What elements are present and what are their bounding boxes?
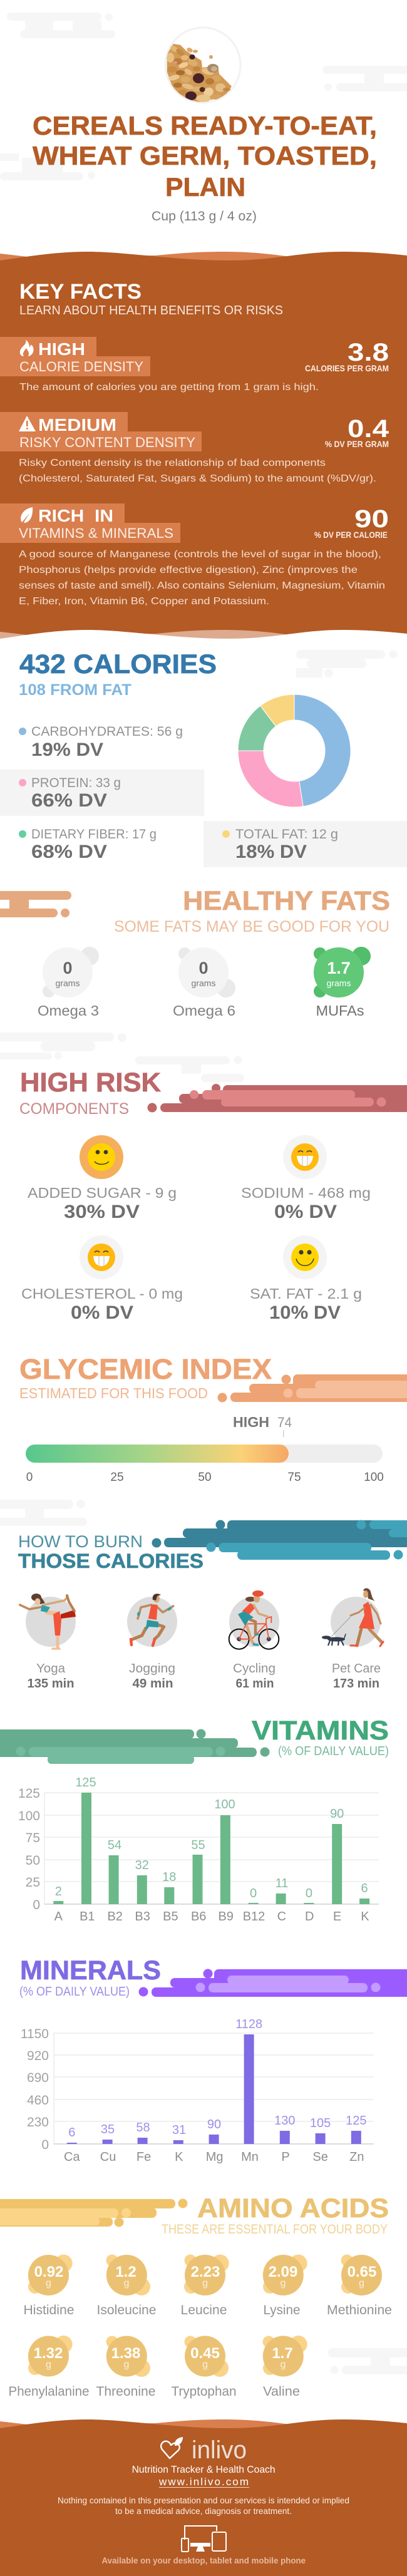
bar chart: minerals: Mg <box>206 2150 223 2164</box>
amino: phenylalanine: 1.32 <box>34 2345 63 2362</box>
panel: high risk components <box>19 1068 407 1323</box>
subheading: key facts: LEARN ABOUT HEALTH BENEFITS OR RISKS <box>19 304 283 317</box>
risk item: added sugar: ADDED SUGAR - 9 g <box>28 1185 177 1201</box>
legend: total fat <box>204 821 407 867</box>
panel: calories <box>0 649 407 867</box>
bar chart: minerals: 920 <box>27 2049 49 2063</box>
bar chart: vitamins: 125 <box>18 1786 40 1801</box>
subheading: minerals: (% OF DAILY VALUE) <box>19 1985 130 1999</box>
bar chart: vitamins: E <box>333 1910 341 1924</box>
panel: how to burn calories <box>18 1520 407 1691</box>
legend: dietary fiber: 68% DV <box>31 842 107 862</box>
bar chart: vitamins: 50 <box>26 1853 40 1868</box>
fact: high calorie density: HIGH <box>38 339 85 359</box>
bar chart: minerals: 230 <box>27 2115 49 2130</box>
gauge scale: 25 <box>110 1471 124 1484</box>
fact: medium risky content density: RISKY CONTENT DENSITY <box>19 435 195 450</box>
icon: flame <box>20 340 34 356</box>
fact: medium risky content density: 0.4 <box>348 415 389 443</box>
fact: rich in vitamins and minerals: senses of taste and smell). Also contains Selenium, Magnesium, Vitamin <box>19 580 385 591</box>
stat: mufas: grams <box>327 978 351 988</box>
stat: omega 6: grams <box>192 978 215 988</box>
amino: leucine <box>180 2254 229 2317</box>
bar chart: vitamins: 75 <box>26 1831 40 1845</box>
bar chart: vitamins: 18 <box>162 1870 176 1884</box>
fact: medium risky content density: (Cholesterol, Saturated Fat, Sugars & Sodium) to the amount (%DV/gr). <box>19 473 376 484</box>
fact: high calorie density: CALORIE DENSITY <box>19 359 143 374</box>
bar chart: minerals: 1128 <box>235 2017 262 2031</box>
amino: histidine: g <box>46 2278 51 2289</box>
decorative banner: healthy fats <box>0 891 71 917</box>
bar chart: minerals: 31 <box>172 2123 186 2137</box>
heading: those calories: THOSE CALORIES <box>18 1550 204 1572</box>
amino: methionine <box>327 2254 392 2317</box>
fact: rich in vitamins and minerals: RICH IN <box>38 506 113 525</box>
bar chart: minerals: Mn <box>241 2150 259 2164</box>
gauge scale: 0 <box>26 1471 33 1484</box>
subheading: healthy fats: SOME FATS MAY BE GOOD FOR YOU <box>114 918 389 935</box>
decorative banner: glycemic <box>218 1374 407 1403</box>
stat: omega 6: Omega 6 <box>173 1002 235 1019</box>
bar chart: minerals: K <box>175 2150 183 2164</box>
amino: lysine <box>263 2255 307 2317</box>
amino: lysine: 2.09 <box>269 2264 297 2280</box>
donut chart: calorie sources <box>238 694 351 807</box>
bar chart: vitamins: B5 <box>163 1910 178 1924</box>
amino: histidine <box>24 2255 74 2317</box>
decorative banner: burn <box>152 1520 407 1560</box>
panel: healthy fats <box>0 886 390 1019</box>
amino: valine: Valine <box>263 2384 300 2399</box>
activity labels: 135 min <box>28 1677 74 1691</box>
bar chart: minerals: 690 <box>27 2071 49 2085</box>
bar chart: vitamins: B2 <box>107 1910 123 1924</box>
amino: leucine: g <box>202 2278 208 2289</box>
amino: methionine: Methionine <box>327 2303 392 2317</box>
fact: rich in vitamins and minerals: Phosphorus (helps provide effective digestion), Zinc (improves the <box>19 565 358 575</box>
heading: amino acids: AMINO ACIDS <box>197 2193 389 2223</box>
bar chart: vitamins: D <box>305 1910 314 1924</box>
bar chart: minerals: 130 <box>274 2114 295 2128</box>
title: WHEAT GERM, TOASTED, <box>33 141 377 170</box>
tagline: Nutrition Tracker & Health Coach <box>132 2465 276 2475</box>
risk item: added sugar <box>28 1135 177 1222</box>
stat: omega 3: Omega 3 <box>38 1002 99 1019</box>
amino: phenylalanine: Phenylalanine <box>9 2384 89 2399</box>
amino: threonine: 1.38 <box>111 2345 140 2362</box>
stat: mufas: MUFAs <box>316 1002 364 1019</box>
fact: medium risky content density: % DV PER GRAM <box>325 439 389 449</box>
bar chart: vitamins: B9 <box>218 1910 234 1924</box>
amino: lysine: Lysine <box>263 2303 301 2317</box>
risk item: sodium: 0% DV <box>274 1202 337 1222</box>
bar chart: vitamins: 54 <box>108 1838 121 1852</box>
amino: phenylalanine <box>9 2336 89 2399</box>
panel: amino acids <box>0 2193 392 2399</box>
amino: phenylalanine: g <box>46 2359 51 2370</box>
availability note: Available on your desktop, tablet and mobile phone <box>101 2555 306 2565</box>
bar chart: vitamins: 100 <box>18 1809 40 1823</box>
legend: total fat: TOTAL FAT: 12 g <box>235 827 338 842</box>
food photo: granola in a circle <box>165 28 240 103</box>
amino: valine: g <box>281 2359 286 2370</box>
stat: omega 3: 0 <box>63 959 73 977</box>
bar chart: minerals: 125 <box>346 2114 366 2128</box>
bar chart: vitamins: B12 <box>243 1910 265 1924</box>
stat: omega 6 <box>173 947 235 1019</box>
disclaimer: to be a medical advice, diagnosis or treatment. <box>115 2506 292 2516</box>
bar chart: vitamins: K <box>361 1910 369 1924</box>
background clouds: header <box>0 13 407 180</box>
subheading: vitamins: (% OF DAILY VALUE) <box>278 1744 389 1758</box>
bar chart: minerals: 105 <box>310 2116 331 2130</box>
amino: threonine <box>96 2336 155 2399</box>
title: CEREALS READY-TO-EAT, <box>33 111 377 140</box>
amino: isoleucine: g <box>124 2278 129 2289</box>
fact: rich in vitamins and minerals: A good source of Manganese (controls the level of sugar in the blood), <box>19 549 381 560</box>
stat: omega 3 <box>38 947 99 1019</box>
stat: omega 3: grams <box>56 978 80 988</box>
decorative banner: amino acids <box>0 2199 188 2227</box>
fact: medium risky content density: Risky Content density is the relationship of bad components <box>19 458 326 468</box>
stat: mufas <box>314 947 371 1019</box>
bar chart: minerals: P <box>281 2150 290 2164</box>
panel: minerals <box>19 1955 407 2164</box>
background clouds: high risk <box>0 1033 244 1082</box>
fact: high calorie density <box>0 337 389 393</box>
risk item: cholesterol: CHOLESTEROL - 0 mg <box>21 1285 183 1302</box>
bar chart: vitamins: 55 <box>191 1838 205 1852</box>
stat: omega 6: 0 <box>198 959 209 977</box>
decorative banner: high risk <box>148 1084 407 1112</box>
heading: minerals: MINERALS <box>20 1955 161 1986</box>
activity labels: Cycling <box>233 1662 276 1676</box>
activity labels: Yoga <box>36 1662 66 1676</box>
subheading: from fat: 108 FROM FAT <box>19 681 131 699</box>
legend: protein: 66% DV <box>31 790 107 811</box>
stat: mufas: 1.7 <box>327 959 351 977</box>
activity labels: Jogging <box>129 1662 175 1676</box>
disclaimer: Nothing contained in this presentation and our services is intended or implied <box>58 2496 349 2505</box>
bar chart: minerals: Cu <box>100 2150 116 2164</box>
amino: leucine: 2.23 <box>191 2264 220 2280</box>
disclaimer <box>58 2496 349 2516</box>
fact: rich in vitamins and minerals <box>0 503 389 607</box>
activity labels: Pet Care <box>332 1662 381 1676</box>
footer <box>0 2419 407 2576</box>
legend: protein: PROTEIN: 33 g <box>31 776 121 790</box>
logo: inlivo: inlivo <box>192 2436 247 2464</box>
fact: medium risky content density <box>0 412 389 484</box>
background cloud: burn <box>0 1500 87 1526</box>
legend: carbohydrates <box>19 724 183 760</box>
icon: warning triangle <box>19 416 36 431</box>
bar chart: vitamins: C <box>277 1910 286 1924</box>
heading: high risk: HIGH RISK <box>20 1068 161 1098</box>
bar chart: minerals: 0 <box>41 2138 49 2152</box>
amino: histidine: 0.92 <box>34 2264 63 2280</box>
legend: carbohydrates: 19% DV <box>31 739 103 760</box>
bar chart: vitamins: 0 <box>250 1887 257 1900</box>
amino: lysine: g <box>281 2278 286 2289</box>
title <box>33 111 377 202</box>
activity: jogging <box>127 1594 177 1647</box>
fact: high calorie density: 3.8 <box>348 339 389 366</box>
fact: rich in vitamins and minerals: VITAMINS & MINERALS <box>19 525 173 541</box>
amino: isoleucine <box>96 2254 157 2317</box>
bar chart: minerals: 35 <box>101 2123 115 2136</box>
heading: glycemic index: GLYCEMIC INDEX <box>19 1353 272 1385</box>
decorative banner: vitamins <box>0 1729 269 1764</box>
fact: high calorie density: CALORIES PER GRAM <box>305 363 389 373</box>
legend: dietary fiber: DIETARY FIBER: 17 g <box>31 827 157 842</box>
bar chart: minerals: 460 <box>27 2093 49 2108</box>
bar chart: vitamins: 11 <box>276 1877 288 1890</box>
amino: tryptophan: 0.45 <box>190 2345 220 2362</box>
gauge scale: 75 <box>287 1471 301 1484</box>
bar chart: minerals: Se <box>312 2150 328 2164</box>
risk item: sodium <box>241 1135 371 1222</box>
activity labels: 61 min <box>235 1677 274 1691</box>
website link: www.inlivo.com <box>158 2476 249 2488</box>
gauge scale <box>26 1471 384 1484</box>
bar chart: vitamins: 2 <box>55 1885 62 1899</box>
amino: valine: 1.7 <box>272 2345 293 2362</box>
gauge bar <box>26 1445 383 1463</box>
risk item: cholesterol <box>21 1235 183 1323</box>
amino: isoleucine: Isoleucine <box>96 2303 157 2317</box>
bar chart: vitamins: B3 <box>135 1910 150 1924</box>
heading: calories: 432 CALORIES <box>19 649 217 679</box>
icon: leaf <box>21 507 33 523</box>
fact: rich in vitamins and minerals: E, Fiber, Iron, Vitamin B6, Copper and Potassium. <box>19 596 269 607</box>
gauge scale: 50 <box>198 1471 212 1484</box>
bar chart: minerals: 6 <box>68 2126 75 2140</box>
icon: devices <box>182 2526 226 2552</box>
fact: rich in vitamins and minerals: % DV PER CALORIE <box>314 530 388 540</box>
amino: tryptophan <box>172 2336 237 2399</box>
amino: tryptophan: g <box>202 2359 208 2370</box>
activity: yoga <box>20 1594 76 1649</box>
amino: isoleucine: 1.2 <box>115 2264 137 2280</box>
bar chart: minerals: 58 <box>136 2121 150 2135</box>
amino: histidine: Histidine <box>24 2303 74 2317</box>
bar chart: vitamins: 32 <box>135 1858 149 1872</box>
subheading: components: COMPONENTS <box>19 1100 129 1118</box>
risk item: cholesterol: 0% DV <box>71 1302 133 1323</box>
heading: key facts: KEY FACTS <box>19 280 142 304</box>
serving size: Cup (113 g / 4 oz) <box>152 209 257 224</box>
title: PLAIN <box>165 172 245 202</box>
risk item: added sugar: 30% DV <box>64 1202 140 1222</box>
amino: leucine: Leucine <box>180 2303 227 2317</box>
bar chart: vitamins: 125 <box>75 1776 96 1790</box>
gauge scale: 100 <box>364 1471 384 1484</box>
panel: key facts <box>0 252 407 639</box>
heading: how to burn: HOW TO BURN <box>18 1532 143 1551</box>
bar chart: minerals: Ca <box>64 2150 80 2164</box>
background cloud: amino acids <box>328 2348 407 2374</box>
legend: carbohydrates: CARBOHYDRATES: 56 g <box>31 724 183 739</box>
amino: tryptophan: Tryptophan <box>172 2384 237 2399</box>
fact: medium risky content density: MEDIUM <box>38 415 116 435</box>
bar chart: vitamins: 100 <box>214 1798 235 1811</box>
glycemic value: HIGH <box>233 1414 269 1430</box>
fact: rich in vitamins and minerals: 90 <box>354 505 389 533</box>
bar chart: vitamins: 90 <box>330 1807 344 1821</box>
amino: methionine: g <box>359 2278 364 2289</box>
decorative banner: minerals <box>139 1969 407 1997</box>
bar chart: minerals: Zn <box>349 2150 364 2164</box>
fact: high calorie density: The amount of calories you are getting from 1 gram is high. <box>19 382 319 393</box>
bar chart: vitamins: 6 <box>361 1882 368 1895</box>
amino: threonine: Threonine <box>96 2384 155 2399</box>
legend: dietary fiber <box>19 827 157 862</box>
panel: vitamins <box>0 1716 389 1924</box>
background cloud: calories <box>296 650 397 677</box>
amino: threonine: g <box>124 2359 129 2370</box>
bar chart: minerals: 90 <box>207 2118 221 2131</box>
heading: vitamins: VITAMINS <box>252 1716 389 1746</box>
bar chart: vitamins: 0 <box>33 1898 40 1912</box>
glycemic value: 74 <box>277 1414 292 1430</box>
heading: healthy fats: HEALTHY FATS <box>183 886 390 916</box>
bar chart: vitamins: A <box>54 1910 63 1924</box>
risk item: saturated fat: SAT. FAT - 2.1 g <box>250 1285 362 1302</box>
bar chart: vitamins <box>18 1776 379 1924</box>
legend: protein <box>0 770 204 816</box>
bar chart: minerals <box>21 2017 374 2164</box>
risk item: saturated fat: 10% DV <box>269 1302 341 1323</box>
logo: inlivo <box>161 2436 247 2464</box>
amino: methionine: 0.65 <box>348 2264 376 2280</box>
bar chart: vitamins: 0 <box>306 1887 312 1900</box>
bar chart: minerals: Fe <box>137 2150 151 2164</box>
bar chart: minerals: 1150 <box>21 2027 49 2041</box>
activity labels <box>28 1662 381 1691</box>
risk item: saturated fat <box>250 1235 362 1323</box>
risk item: sodium: SODIUM - 468 mg <box>241 1185 371 1201</box>
activity labels: 49 min <box>133 1677 173 1691</box>
bar chart: vitamins: 25 <box>26 1875 40 1890</box>
activity: pet care <box>322 1588 383 1647</box>
bar chart: vitamins: B1 <box>80 1910 95 1924</box>
bar chart: vitamins: B6 <box>191 1910 206 1924</box>
activity: cycling <box>229 1590 279 1649</box>
glycemic value <box>233 1414 292 1437</box>
subheading: glycemic: ESTIMATED FOR THIS FOOD <box>19 1385 208 1401</box>
panel: glycemic index <box>19 1353 407 1484</box>
activity labels: 173 min <box>333 1677 379 1691</box>
amino: valine <box>263 2336 307 2399</box>
legend: total fat: 18% DV <box>235 842 307 862</box>
